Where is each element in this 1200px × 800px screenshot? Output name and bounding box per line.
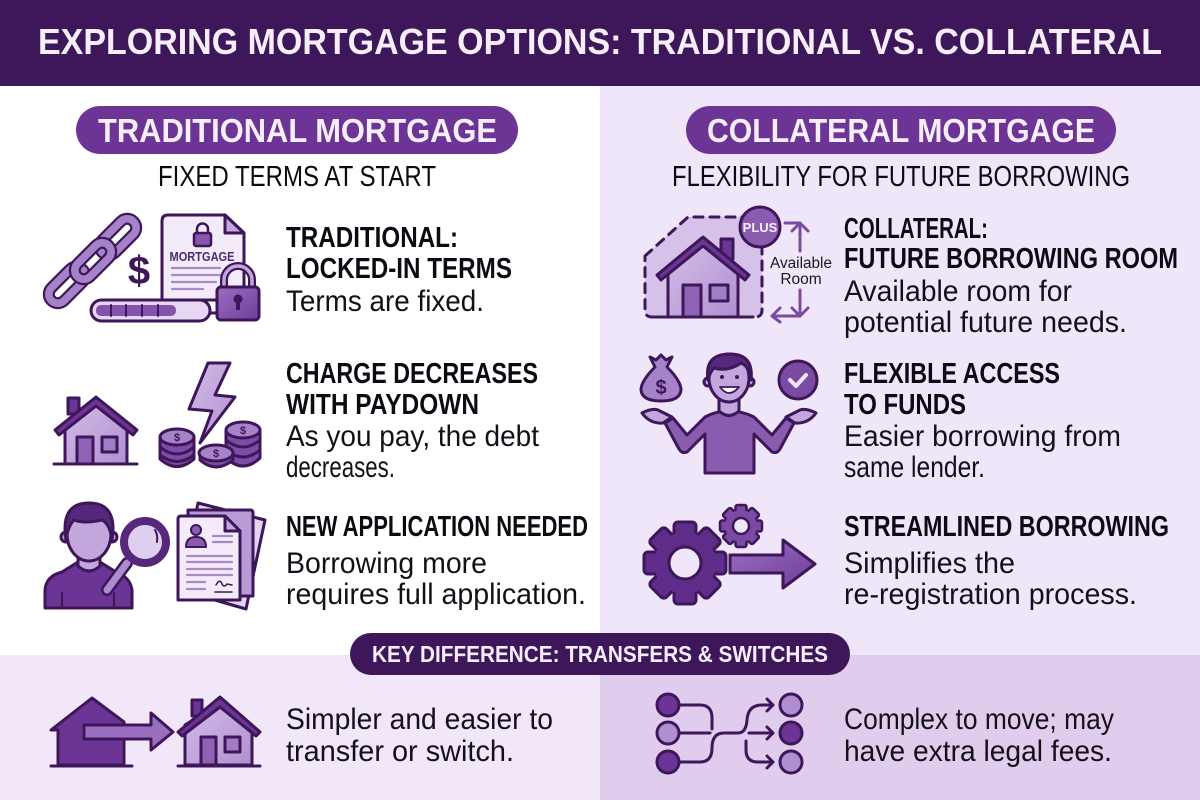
icon: application documents — [178, 503, 265, 609]
icon: chain, document, lock and progress bar: MORTGAGE — [170, 249, 235, 264]
text: locked-in terms — [286, 222, 512, 318]
icon: house with available room: PLUS — [743, 220, 778, 235]
text: charge decreases: As you pay, the debt — [286, 420, 540, 453]
text: charge decreases: decreases. — [286, 451, 395, 484]
icon: person with money bag and check — [641, 354, 817, 473]
text: locked-in terms: Terms are fixed. — [286, 285, 484, 318]
text: new application: Borrowing more — [286, 547, 487, 580]
text: new application: requires full application. — [286, 578, 586, 611]
panel: background collateral — [600, 86, 1200, 655]
heading: key difference: KEY DIFFERENCE: TRANSFERS & SWITCHES — [372, 641, 828, 667]
icon: person with magnifier — [45, 503, 166, 608]
icon: house — [54, 397, 137, 464]
text: flexible access: same lender. — [844, 451, 985, 484]
text: locked-in terms: TRADITIONAL: — [286, 222, 458, 254]
text: flexible access: Easier borrowing from — [844, 420, 1121, 453]
icon: house with available room — [645, 207, 832, 322]
text: charge decreases: WITH PAYDOWN — [286, 389, 479, 421]
heading: collateral mortgage: COLLATERAL MORTGAGE — [707, 112, 1095, 149]
text: flexible access: FLEXIBLE ACCESS — [844, 358, 1060, 390]
title banner: EXPLORING MORTGAGE OPTIONS: TRADITIONAL VS. COLLATERAL — [38, 21, 1162, 62]
icon: lightning bolt and coins: $ — [174, 432, 180, 444]
text: charge decreases: CHARGE DECREASES — [286, 358, 538, 390]
text: locked-in terms: LOCKED-IN TERMS — [286, 253, 512, 285]
icon: complex routing — [657, 694, 802, 773]
title banner — [0, 0, 1200, 86]
icon: chain, document, lock and progress bar: $ — [128, 249, 150, 293]
text: simpler transfer: transfer or switch. — [286, 735, 514, 768]
icon: lightning bolt and coins: $ — [240, 425, 246, 437]
text: future borrowing room: Available room for — [844, 275, 1072, 308]
icon: house with available room: Available — [770, 255, 832, 272]
text: complex to move: Complex to move; may — [844, 703, 1114, 736]
icon: person with money bag and check: $ — [655, 377, 667, 399]
icon: house with available room: Room — [780, 271, 822, 288]
text: future borrowing room — [844, 213, 1178, 339]
text: new application — [286, 511, 588, 611]
text: streamlined borrowing — [844, 511, 1169, 611]
heading: key difference — [350, 633, 850, 675]
panel: collateral mortgage — [641, 106, 1178, 611]
text: streamlined borrowing: Simplifies the — [844, 547, 1015, 580]
icon: lightning bolt and coins: $ — [213, 448, 219, 460]
text: simpler transfer: Simpler and easier to — [286, 703, 553, 736]
text: streamlined borrowing: re-registration process. — [844, 578, 1137, 611]
icon: gears and arrow — [644, 505, 815, 604]
text: flexible access: TO FUNDS — [844, 389, 966, 421]
panel: background traditional — [0, 86, 600, 655]
text: complex to move: have extra legal fees. — [844, 735, 1112, 768]
text: future borrowing room: COLLATERAL: — [844, 213, 988, 245]
icon: chain, document, lock and progress bar — [45, 215, 259, 321]
icon: lightning bolt and coins — [160, 363, 260, 467]
panel: key difference — [0, 633, 1200, 800]
icon: house transfer — [51, 697, 260, 766]
text: new application: NEW APPLICATION NEEDED — [286, 511, 588, 543]
panel: traditional mortgage — [45, 106, 588, 611]
text: flexible access — [844, 358, 1121, 484]
text: complex to move — [844, 703, 1114, 768]
heading: traditional mortgage: TRADITIONAL MORTGAGE — [98, 112, 497, 149]
text: simpler transfer — [286, 703, 553, 768]
text: future borrowing room: potential future needs. — [844, 306, 1127, 339]
text: charge decreases — [286, 358, 540, 484]
subheading: fixed terms: FIXED TERMS AT START — [158, 161, 436, 193]
